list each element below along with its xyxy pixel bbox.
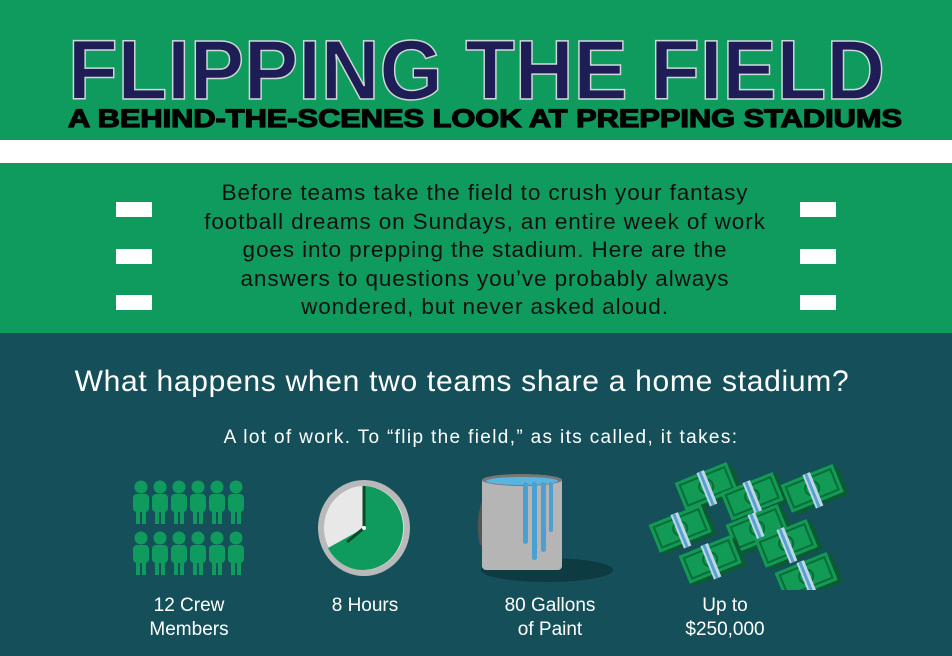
icon: paint bucket — [480, 474, 613, 582]
label: hours: 8 Hours — [332, 595, 398, 616]
left dashes — [116, 202, 152, 310]
icons — [133, 462, 849, 590]
question heading: What happens when two teams share a home stadium? — [75, 365, 849, 398]
icon: crew — [133, 480, 244, 575]
title: FLIPPING THE FIELD — [68, 23, 885, 117]
label: money — [685, 595, 765, 640]
subtitle: A BEHIND-THE-SCENES LOOK AT PREPPING STADIUMS — [68, 105, 902, 133]
label: paint — [505, 595, 595, 640]
intro panel — [0, 163, 952, 333]
label: money: Up to — [702, 595, 748, 616]
label: paint: 80 Gallons — [505, 595, 595, 616]
intro text: Before teams take the field to crush your fantasy — [222, 180, 748, 205]
label: paint: of Paint — [518, 619, 582, 640]
label: crew: Members — [149, 619, 229, 640]
white stripe — [0, 140, 952, 163]
header band — [0, 0, 952, 140]
label: crew: 12 Crew — [154, 595, 224, 616]
intro text: wondered, but never asked aloud. — [301, 294, 669, 319]
intro text: goes into prepping the stadium. Here are the — [243, 237, 727, 262]
icon: clock — [318, 480, 410, 576]
label: money: $250,000 — [685, 619, 765, 640]
intro text: football dreams on Sundays, an entire week of work — [204, 209, 766, 234]
right dashes — [800, 202, 836, 310]
subheading: A lot of work. To “flip the field,” as its called, it takes: — [224, 427, 738, 448]
label: crew — [149, 595, 229, 640]
intro text: answers to questions you’ve probably always — [241, 266, 729, 291]
intro text — [204, 180, 766, 319]
icon: money — [648, 460, 849, 605]
